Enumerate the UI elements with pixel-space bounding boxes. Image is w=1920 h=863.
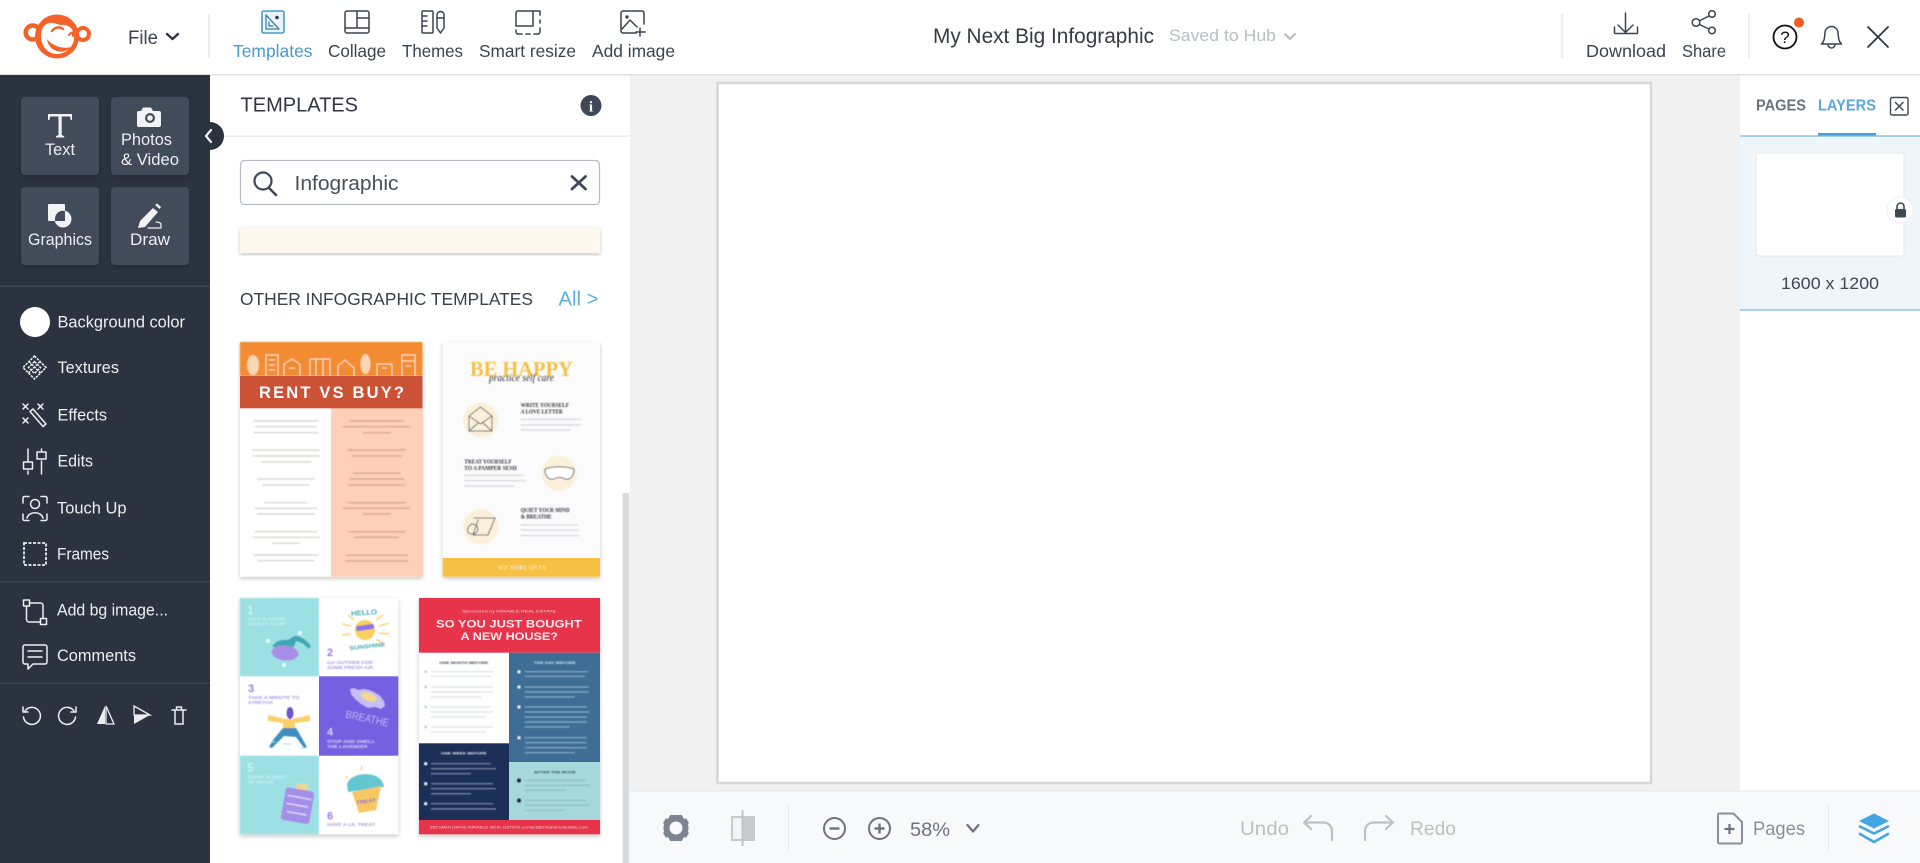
- redo: [1365, 816, 1456, 840]
- cell 5: water: OF WATER: [248, 780, 275, 784]
- layers toggle: [1859, 814, 1889, 842]
- redo: Redo: [1410, 818, 1456, 840]
- cell 1: sleep: [240, 598, 319, 676]
- item: comments: [23, 645, 136, 669]
- button: graphics: [21, 187, 99, 265]
- red header: A NEW HOUSE?: [461, 631, 558, 643]
- tip: pamper sesh: TREAT YOURSELF: [464, 458, 512, 466]
- cell 3: stretch: 3: [248, 683, 254, 695]
- search box: Infographic: [294, 172, 398, 195]
- tool: themes: Themes: [402, 41, 463, 61]
- cell 2: outside: SUNSHINE: [349, 642, 386, 652]
- section: the day before: THE DAY BEFORE: [534, 660, 576, 665]
- template card: new house: [419, 598, 600, 834]
- red header: SO YOU JUST BOUGHT: [436, 619, 582, 631]
- tool: add image: Add image: [592, 41, 675, 61]
- cell 5: water: [240, 756, 319, 834]
- card title: BE HAPPY: [470, 357, 573, 381]
- info icon: i: [589, 100, 593, 116]
- tip: quiet your mind: & BREATHE: [521, 514, 552, 521]
- info icon: [580, 95, 602, 116]
- button: text: [21, 97, 99, 175]
- button: draw: [111, 187, 189, 265]
- orange skyline band: [240, 342, 422, 376]
- yellow footer: SEE MORE ON US: [498, 564, 546, 572]
- template card: six wellness tips: [240, 598, 398, 834]
- tip: love letter: WRITE YOURSELF: [521, 402, 569, 409]
- layer thumbnail: [1756, 153, 1904, 256]
- tool: smart resize: [479, 11, 576, 61]
- tool: templates: [233, 11, 313, 61]
- add pages: Pages: [1753, 818, 1805, 840]
- item: textures: [23, 356, 119, 379]
- scrollbar: [623, 493, 629, 863]
- tab: layers: [1818, 98, 1876, 136]
- item: add bg image: [24, 600, 168, 624]
- tool: themes: [402, 11, 463, 61]
- section: after the move: [509, 762, 600, 820]
- notification bell: [1822, 27, 1842, 48]
- item: effects: [23, 404, 107, 426]
- section: one month before: ONE MONTH BEFORE: [439, 660, 489, 665]
- cell 6: treat: 6: [327, 810, 333, 822]
- split view: [731, 810, 755, 846]
- section: the day before: [509, 653, 600, 762]
- cell 5: water: 5: [247, 761, 254, 775]
- item: add bg image: Add bg image...: [57, 600, 168, 620]
- section: after the move: AFTER THE MOVE: [534, 769, 576, 774]
- zoom controls: 58%: [910, 819, 950, 841]
- tool: smart resize: Smart resize: [479, 41, 576, 61]
- tool: collage: Collage: [328, 41, 386, 61]
- button: graphics: Graphics: [28, 231, 92, 249]
- templates panel: [210, 76, 630, 863]
- save status: Saved to Hub: [1169, 26, 1276, 45]
- cell 4: lavender: 4: [327, 727, 334, 739]
- cell 4: lavender: BREATHE: [344, 709, 390, 730]
- item: edits: Edits: [58, 452, 93, 470]
- button: text: Text: [45, 141, 75, 159]
- help icon: [1774, 18, 1804, 48]
- red footer: [419, 820, 600, 834]
- red footer: 555 MAIN DRIVE MIRABLE REAL ESTATE contact@mirablerealestate.com: [430, 826, 588, 830]
- cell 6: treat: TREAT: [356, 798, 377, 806]
- design canvas: [718, 83, 1651, 783]
- tip: love letter: [463, 402, 581, 438]
- logo: monkey: [26, 14, 89, 58]
- cell 4: lavender: [319, 676, 398, 756]
- layer row: [1740, 136, 1920, 310]
- cell 4: lavender: STOP AND SMELL: [327, 739, 375, 744]
- template card: rent vs buy: [240, 342, 422, 577]
- share: [1682, 11, 1726, 61]
- collapse handle: [196, 122, 224, 150]
- close panel: [1890, 98, 1908, 115]
- tip: pamper sesh: [464, 456, 577, 491]
- cell 3: stretch: TAKE A MINUTE TO: [248, 695, 300, 700]
- button: photos and video: [111, 97, 189, 175]
- yellow footer: [443, 558, 600, 577]
- item: textures: Textures: [58, 358, 119, 377]
- item: edits: [24, 449, 93, 474]
- item: frames: Frames: [57, 544, 109, 564]
- item: touch up: [23, 496, 126, 520]
- tab: pages: PAGES: [1756, 98, 1806, 115]
- left column copy: [252, 421, 320, 561]
- undo: Undo: [1240, 818, 1289, 840]
- cell 1: sleep: NIGHT'S SLEEP: [248, 622, 286, 626]
- section: one week before: [419, 743, 509, 820]
- tool: templates: Templates: [233, 41, 313, 61]
- bottom bar: [630, 790, 1920, 863]
- tab: layers: LAYERS: [1818, 98, 1876, 115]
- tip: pamper sesh: TO A PAMPER SESH: [464, 465, 517, 472]
- tool: add image: [592, 11, 675, 61]
- lock badge: [1887, 197, 1913, 223]
- template card: be happy: [443, 342, 600, 577]
- cell 6: treat: HAVE A LIL TREAT: [327, 822, 375, 827]
- search box: [240, 160, 600, 204]
- red header: Sponsored by MIRABLE REAL ESTATE: [462, 610, 557, 614]
- cell 2: outside: HELLO: [351, 609, 378, 618]
- cell 4: lavender: THE LAVENDER: [327, 744, 368, 749]
- file menu: File: [128, 28, 158, 49]
- section: one week before: ONE WEEK BEFORE: [441, 751, 487, 756]
- undo: [1240, 816, 1332, 840]
- file menu: [128, 28, 178, 49]
- cell 5: water: DRINK PLENTY: [248, 774, 286, 780]
- share: Share: [1682, 41, 1726, 61]
- top toolbar: [0, 0, 1920, 76]
- settings gear: [663, 815, 689, 841]
- item: background color: Background color: [58, 312, 185, 332]
- item: effects: Effects: [58, 406, 107, 424]
- item: comments: Comments: [57, 646, 136, 665]
- right column copy: [343, 421, 411, 561]
- cell 2: outside: GO OUTSIDE FOR: [327, 660, 373, 665]
- help icon: ?: [1780, 28, 1790, 47]
- button: draw: Draw: [130, 231, 170, 249]
- tip: quiet your mind: QUIET YOUR MIND: [521, 507, 570, 514]
- cell 2: outside: 2: [327, 647, 333, 659]
- cell 6: treat: [327, 766, 384, 827]
- previous template sliver: [240, 227, 600, 253]
- zoom controls: [824, 818, 978, 841]
- tip: quiet your mind: [463, 507, 579, 544]
- card title: practice self care: [488, 373, 554, 384]
- item: background color: [20, 307, 185, 337]
- cell 2: outside: SOME FRESH AIR: [327, 665, 374, 670]
- red header: [419, 598, 600, 653]
- cell 1: sleep: GET A GOOD: [248, 616, 287, 622]
- button: photos and video: & Video: [121, 151, 179, 169]
- cell 3: stretch: STRETCH: [248, 700, 273, 705]
- section: one month before: [424, 660, 493, 732]
- item: touch up: Touch Up: [57, 498, 126, 518]
- section heading: OTHER INFOGRAPHIC TEMPLATES: [240, 289, 533, 309]
- layer dimensions: 1600 x 1200: [1781, 274, 1879, 293]
- link: all: All >: [558, 288, 598, 310]
- layers panel: [1740, 76, 1920, 791]
- download: [1586, 13, 1666, 61]
- tool: collage: [328, 11, 386, 61]
- cell 1: sleep: 1: [247, 603, 254, 617]
- tip: love letter: A LOVE LETTER: [521, 408, 563, 416]
- document title: My Next Big Infographic: [933, 25, 1154, 48]
- add pages: [1718, 814, 1805, 844]
- left tool sidebar: [0, 75, 210, 863]
- cell 2: outside: [327, 609, 389, 670]
- red title band: [240, 376, 422, 408]
- panel heading: TEMPLATES: [240, 94, 358, 116]
- button: photos and video: Photos: [121, 131, 172, 149]
- cell 3: stretch: [248, 683, 310, 748]
- edit actions: [23, 706, 186, 724]
- item: frames: [24, 543, 109, 565]
- download: Download: [1586, 41, 1666, 61]
- red title band: RENT VS BUY?: [259, 384, 404, 402]
- close editor: [1868, 27, 1888, 47]
